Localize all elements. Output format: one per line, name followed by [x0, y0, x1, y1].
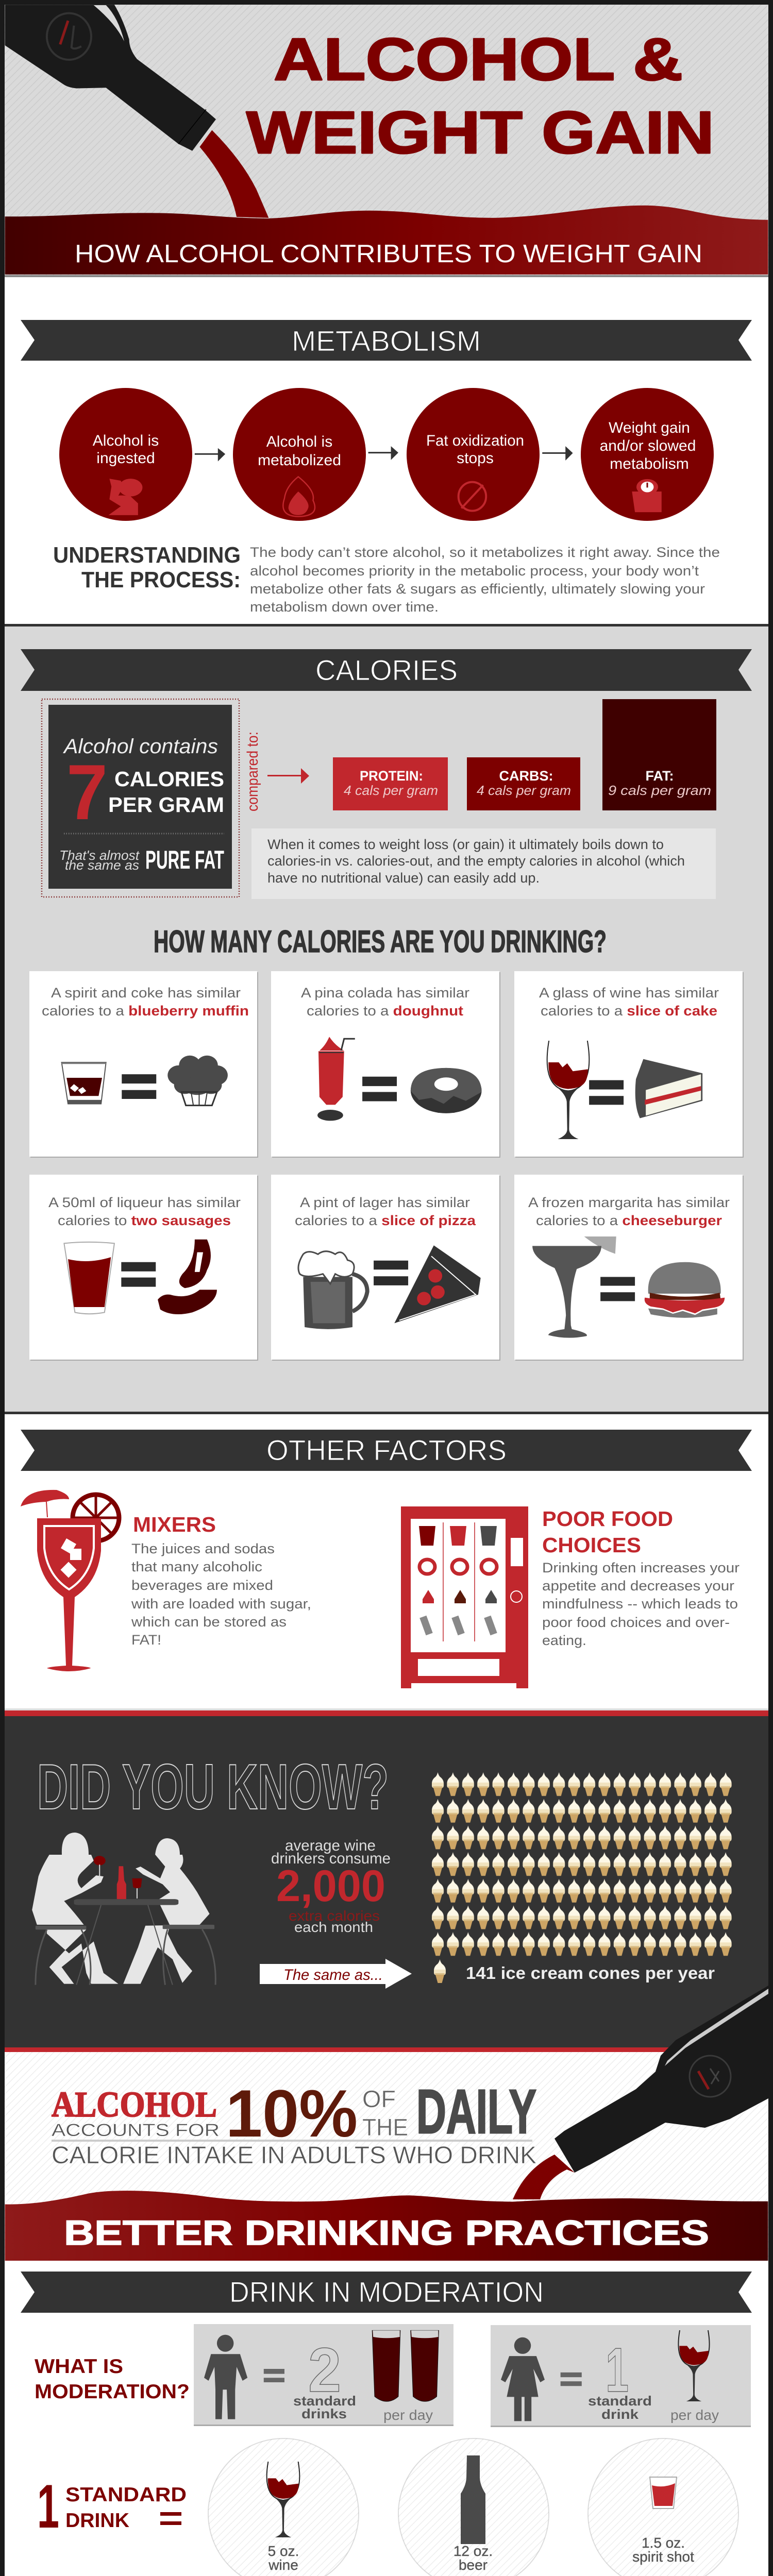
text block: mixers: beverages are mixed [131, 1578, 273, 1593]
bar: carbs [467, 757, 580, 810]
text block: poor food choices: Drinking often increases your [542, 1560, 740, 1575]
heading: metabolism [21, 320, 752, 361]
card: pina colada [271, 971, 500, 1158]
card: liqueur: calories to two sausages [58, 1213, 231, 1228]
icon: beer mug equals pizza [298, 1245, 481, 1329]
icon: whisky glass equals muffin [62, 1056, 228, 1106]
text block: mixers [131, 1513, 311, 1648]
circle: spirit: 1.5 oz. [642, 2535, 685, 2551]
icon: pina colada equals doughnut [317, 1037, 482, 1121]
title [246, 26, 714, 166]
stat: ten percent of calories: DAILY [416, 2076, 536, 2146]
icon: man [204, 2335, 247, 2419]
label: one standard drink: STANDARD [65, 2484, 187, 2506]
text block: poor food choices: CHOICES [542, 1533, 641, 1557]
icon: wine bottle [554, 1986, 768, 2173]
card: pina colada: A pina colada has similar [301, 985, 469, 1001]
circle: wine [208, 2438, 359, 2576]
callout: 2,000 extra calories: average wine [285, 1837, 376, 1854]
understanding the process: THE PROCESS: [81, 567, 241, 592]
icon: prohibited [459, 482, 486, 511]
understanding the process: metabolize other fats & sugars as efficiently, ultimately slowing your [250, 581, 705, 597]
header panel [5, 5, 768, 275]
step: fat oxidization stops: stops [457, 450, 494, 467]
card: women one drink: 1 [606, 2335, 629, 2405]
callout: 7 calories per gram: CALORIES [114, 767, 224, 791]
stat: ten percent of calories: 10% [226, 2076, 358, 2151]
arrow: the same as: The same as... [283, 1967, 383, 1984]
label: what is moderation [35, 2355, 190, 2403]
text block: mixers: MIXERS [133, 1513, 216, 1536]
step: alcohol is ingested [59, 388, 192, 521]
bar: protein: PROTEIN: [360, 768, 423, 784]
text block: poor food choices: eating. [542, 1633, 586, 1648]
bar: fat [602, 699, 716, 810]
bar: fat: 9 cals per gram [608, 783, 711, 798]
callout: 7 calories per gram: That's almost [59, 848, 140, 863]
stat: ten percent of calories: CALORIE INTAKE IN ADULTS WHO DRINK [52, 2141, 536, 2168]
label: one standard drink: 1 [37, 2472, 59, 2541]
icon: wine glass [678, 2330, 710, 2401]
callout: 2,000 extra calories: 2,000 [276, 1861, 385, 1911]
callout: 7 calories per gram: Alcohol contains [63, 735, 218, 758]
card: pint of lager: A pint of lager has similar [300, 1195, 470, 1210]
circle: beer: beer [459, 2557, 488, 2573]
circle: spirit: spirit shot [632, 2549, 694, 2565]
heading: drink in moderation: DRINK IN MODERATION [229, 2276, 544, 2308]
label: what is moderation: WHAT IS [35, 2355, 123, 2378]
card: men two drinks [194, 2324, 453, 2426]
card: women one drink: drink [601, 2406, 639, 2422]
bar: protein: 4 cals per gram [344, 783, 438, 798]
callout: 2,000 extra calories: drinkers consume [271, 1850, 391, 1867]
title: ALCOHOL & [274, 26, 683, 93]
understanding the process: UNDERSTANDING [53, 543, 241, 568]
arrow [195, 448, 225, 461]
text block: mixers: with are loaded with sugar, [131, 1596, 311, 1612]
card: glass of wine: A glass of wine has similar [539, 985, 719, 1001]
step: alcohol is ingested: Alcohol is [93, 432, 159, 449]
text block: mixers: that many alcoholic [131, 1559, 262, 1574]
understanding the process: alcohol becomes priority in the metabolic process, your body won’t [250, 563, 699, 579]
icon: scale [632, 479, 662, 512]
step: fat oxidization stops: Fat oxidization [426, 432, 524, 449]
text block: mixers: which can be stored as [131, 1614, 287, 1630]
arrow: the same as [260, 1959, 412, 1989]
icon: vending machine [401, 1506, 528, 1688]
heading: other factors [21, 1430, 752, 1471]
stat: ten percent of calories: OF [362, 2086, 396, 2112]
callout: 2,000 extra calories: each month [294, 1919, 373, 1935]
text block: mixers: The juices and sodas [131, 1541, 275, 1556]
callout: 7 calories per gram: 7 [66, 749, 108, 836]
icon: margarita equals burger [532, 1236, 725, 1338]
subtitle: HOW ALCOHOL CONTRIBUTES TO WEIGHT GAIN [75, 240, 702, 268]
step: alcohol is metabolized [233, 388, 366, 521]
card: spirit and coke [29, 971, 258, 1158]
text block: weight loss: calories-in vs. calories-out, and the empty calories in alcohol (which [267, 853, 685, 869]
icon: two pints [372, 2330, 439, 2401]
label: compared to: compared to: [244, 732, 261, 811]
card: men two drinks: per day [383, 2407, 433, 2423]
understanding the process [53, 543, 720, 615]
card: women one drink: standard [588, 2393, 652, 2409]
bar: carbs: 4 cals per gram [477, 783, 571, 798]
text block: poor food choices: appetite and decreases your [542, 1578, 734, 1594]
icon: flame [283, 477, 315, 517]
icon: woman [501, 2337, 545, 2421]
label: one standard drink [37, 2472, 187, 2541]
text block: poor food choices: poor food choices and over- [542, 1615, 730, 1630]
arrow [267, 768, 309, 784]
heading: calories [21, 649, 752, 691]
title: WEIGHT GAIN [246, 99, 714, 166]
card: men two drinks: drinks [301, 2406, 347, 2421]
bar: fat: FAT: [645, 768, 674, 784]
heading: did you know: DID YOU KNOW? [37, 1752, 389, 1823]
card: frozen margarita: calories to a cheeseburger [536, 1213, 722, 1228]
card: liqueur: A 50ml of liqueur has similar [48, 1195, 241, 1210]
chart: ice cream cones [432, 1772, 735, 1959]
step: fat oxidization stops [407, 388, 540, 521]
panel: metabolism [5, 275, 768, 624]
card: pint of lager [271, 1175, 500, 1361]
panel: did you know [5, 1708, 768, 2047]
label: one standard drink: DRINK [65, 2510, 129, 2532]
card: liqueur [29, 1175, 258, 1361]
circle: beer [398, 2438, 549, 2576]
card: women one drink: per day [670, 2407, 719, 2423]
text block: weight loss: When it comes to weight loss (or gain) it ultimately boils down to [267, 837, 664, 852]
card: pint of lager: calories to a slice of pizza [295, 1213, 476, 1228]
icon: pint equals sausages [64, 1240, 217, 1314]
step: alcohol is metabolized: Alcohol is [266, 433, 332, 450]
icon: shot glass [650, 2477, 677, 2509]
circle: beer: 12 oz. [453, 2543, 493, 2559]
heading: better drinking practices: BETTER DRINKING PRACTICES [64, 2213, 709, 2252]
text block: weight loss: have no nutritional value) can easily add up. [267, 870, 540, 886]
card: frozen margarita [514, 1175, 744, 1361]
callout: 7 calories per gram: PER GRAM [108, 793, 224, 817]
circle: wine: 5 oz. [268, 2543, 299, 2559]
illustration: couple at table [32, 1833, 215, 1985]
text block: poor food choices [542, 1507, 740, 1648]
step: weight gain [581, 388, 714, 521]
callout: 7 calories per gram [42, 699, 239, 897]
text block: weight loss [251, 828, 716, 899]
text block: mixers: FAT! [131, 1632, 161, 1648]
callout: 2,000 extra calories [271, 1837, 391, 1935]
step: alcohol is ingested: ingested [96, 450, 155, 467]
step: alcohol is metabolized: metabolized [258, 452, 341, 469]
callout: 2,000 extra calories: extra calories [289, 1908, 380, 1924]
understanding the process: The body can’t store alcohol, so it metabolizes it right away. Since the [250, 545, 720, 560]
icon: single cone [434, 1959, 446, 1983]
card: women one drink [491, 2325, 751, 2427]
icon: cocktail with umbrella [21, 1490, 119, 1671]
label: what is moderation: MODERATION? [35, 2381, 190, 2403]
circle: wine: wine [268, 2557, 298, 2573]
card: glass of wine [514, 971, 744, 1158]
icon: wine glass equals cake [547, 1041, 702, 1139]
text block: poor food choices: POOR FOOD [542, 1507, 673, 1531]
arrow [368, 446, 398, 460]
card: frozen margarita: A frozen margarita has similar [528, 1195, 730, 1210]
panel: alcohol ten percent [5, 1986, 768, 2261]
equals [264, 2369, 284, 2382]
icon: beer bottle [461, 2455, 485, 2544]
text block: poor food choices: mindfulness -- which leads to [542, 1596, 738, 1612]
icon: person drinking [108, 479, 142, 515]
panel: drink in moderation [5, 2261, 768, 2576]
arrow [542, 446, 573, 461]
panel: calories [5, 624, 768, 1412]
bar: carbs: CARBS: [499, 768, 553, 784]
icon: wine bottle [5, 5, 216, 151]
heading: drink in moderation [21, 2272, 752, 2313]
heading: calories: CALORIES [315, 654, 458, 686]
circle: spirit [588, 2438, 738, 2576]
card: men two drinks: standard [293, 2393, 356, 2409]
card: glass of wine: calories to a slice of cake [541, 1003, 717, 1019]
callout: 7 calories per gram: the same as [65, 857, 139, 873]
heading: other factors: OTHER FACTORS [266, 1434, 507, 1466]
stat: 141 cones: 141 ice cream cones per year [466, 1963, 715, 1982]
card: spirit and coke: calories to a blueberry muffin [42, 1003, 249, 1019]
stat: ten percent of calories: ACCOUNTS FOR [52, 2121, 220, 2140]
panel: other factors [5, 1412, 768, 1708]
stat: ten percent of calories: ALCOHOL [52, 2085, 217, 2125]
callout: 7 calories per gram: PURE FAT [145, 845, 224, 874]
bar: protein [333, 757, 448, 810]
step: weight gain: Weight gain [609, 419, 690, 436]
understanding the process: metabolism down over time. [250, 599, 439, 615]
card: pina colada: calories to a doughnut [307, 1003, 463, 1019]
icon: wine glass [267, 2462, 299, 2537]
wine wave and stream [5, 2155, 768, 2261]
equals [561, 2372, 582, 2386]
step: weight gain: and/or slowed [600, 437, 696, 454]
card: men two drinks: 2 [308, 2335, 341, 2405]
stat: ten percent of calories [52, 2076, 536, 2168]
card: spirit and coke: A spirit and coke has similar [51, 985, 241, 1001]
step: weight gain: metabolism [610, 455, 689, 472]
stat: ten percent of calories: THE [362, 2114, 408, 2141]
wine wave and stream [5, 130, 768, 275]
heading: metabolism: METABOLISM [292, 325, 481, 357]
